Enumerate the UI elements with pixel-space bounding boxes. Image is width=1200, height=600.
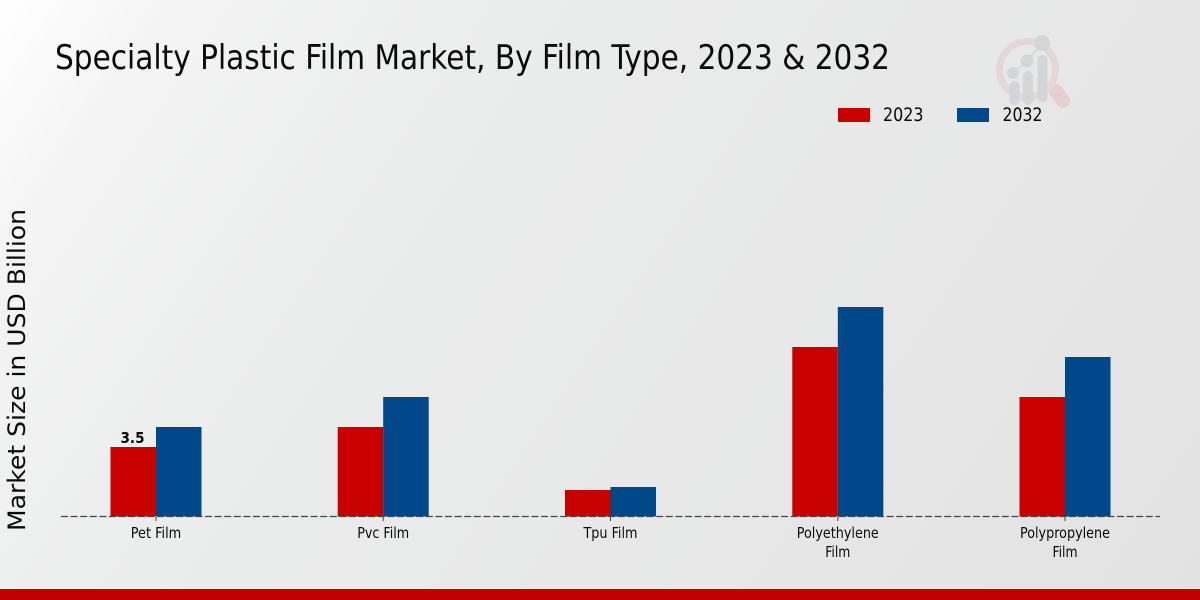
legend: 2023: 2023 — [883, 104, 924, 126]
bars: Tpu Film — [565, 487, 656, 516]
x axis baseline — [61, 516, 1160, 518]
data label: 3.5: 3.5 — [120, 429, 144, 447]
bar chart — [61, 307, 1160, 561]
legend: 2023 — [838, 104, 924, 126]
category labels: Pet Film — [131, 524, 181, 542]
category labels: Polypropylene — [1020, 524, 1110, 542]
bars: Pvc Film — [338, 397, 429, 516]
title: Specialty Plastic Film Market, By Film Type, 2023 & 2032 — [55, 38, 890, 77]
category labels: Tpu Film — [583, 524, 638, 542]
category labels: Film — [1052, 543, 1078, 561]
bars: Pet Film — [110, 427, 202, 516]
y axis title: Market Size in USD Billion — [3, 209, 31, 531]
category labels: Polyethylene — [797, 524, 879, 542]
category labels: Film — [825, 543, 850, 561]
category labels: Pvc Film — [357, 524, 409, 542]
icon: magnifier logo watermark — [1000, 35, 1063, 105]
bars: Polypropylene Film — [1020, 357, 1110, 516]
bars: Polyethylene Film — [792, 307, 883, 516]
legend — [838, 104, 1042, 126]
category labels — [131, 524, 1110, 561]
footer bar — [0, 589, 1200, 600]
legend: 2032 — [957, 104, 1042, 126]
legend: 2032: 2032 — [1002, 104, 1042, 126]
